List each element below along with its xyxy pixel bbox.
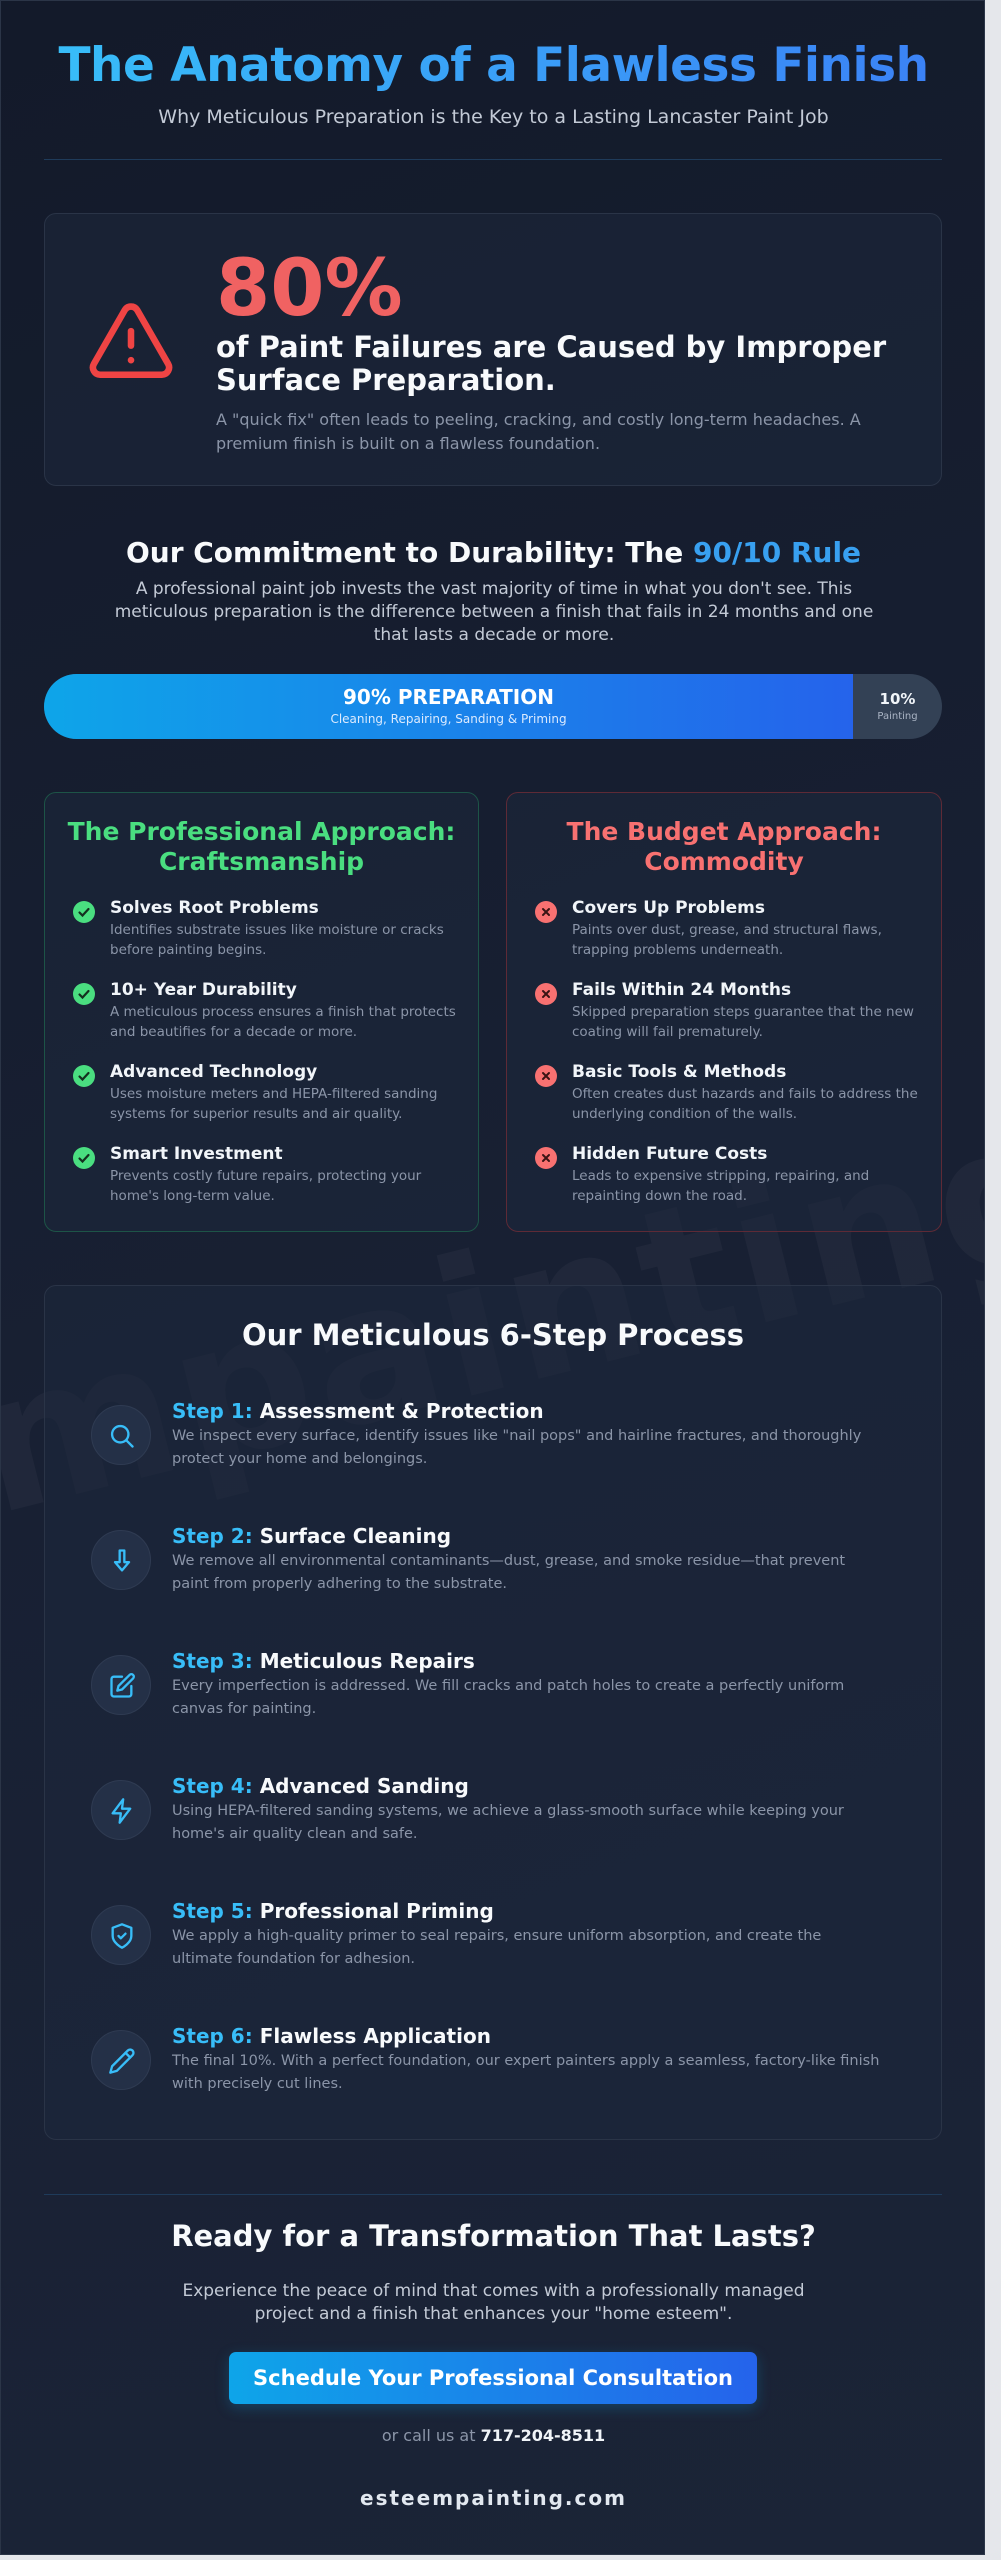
panel: 6-step process: Every imperfection is addressed. We fill cracks and patch holes to create a perfectly uniform canvas for painting. [172,1678,844,1717]
panel: budget approach: Basic Tools & Methods [572,1062,786,1082]
CTA heading: Ready for a Transformation That Lasts? [171,2219,816,2253]
CTA text: Experience the peace of mind that comes with a professionally managed project and a finish that enhances your "home esteem". [182,2281,805,2324]
panel: professional approach: 10+ Year Durability [110,980,297,1000]
panel: budget approach: Covers Up Problems [572,898,765,918]
panel: professional approach: Smart Investment [110,1144,283,1164]
paragraph: A professional paint job invests the vast majority of time in what you don't see. This meticulous preparation is the difference between a finish that fails in 24 months and one that lasts a decade or more. [115,579,873,645]
item 4 [73,1144,422,1204]
panel title: Commodity [644,847,804,876]
step 1 [91,1399,861,1467]
phone: or call us at 717-204-8511 [382,2426,605,2445]
panel: 6-step process: We inspect every surface, identify issues like "nail pops" and hairline fractures, and thoroughly protect your home and belongings. [172,1428,861,1467]
panel: professional approach: Advanced Technology [110,1062,317,1082]
bar chart: 90/10: Painting [877,711,918,722]
panel: budget approach [506,792,942,1232]
description: A "quick fix" often leads to peeling, cracking, and costly long-term headaches. A premium finish is built on a flawless foundation. [216,410,861,453]
panel: 6-step process: We apply a high-quality primer to seal repairs, ensure uniform absorption, and create the ultimate foundation for adhesion. [172,1928,821,1967]
panel: 80% stat [44,213,942,486]
bar chart: 90/10 [44,674,942,739]
bar chart: 90/10: Cleaning, Repairing, Sanding & Priming [330,712,567,726]
panel: budget approach: Skipped preparation steps guarantee that the new coating will fail prematurely. [572,1004,914,1040]
step 5 [91,1899,821,1967]
heading: 90/10 rule: Our Commitment to Durability: The 90/10 Rule [126,536,861,569]
panel: 6-step process: Using HEPA-filtered sanding systems, we achieve a glass-smooth surface while keeping your home's air quality clean and safe. [172,1803,844,1842]
panel: professional approach [44,792,479,1232]
panel: 6-step process: Step 4: Advanced Sanding [172,1774,469,1798]
website: esteempainting.com [360,2486,627,2510]
step 3 [91,1649,844,1717]
CTA button [229,2352,757,2404]
panel: 6-step process [44,1285,942,2140]
panel: budget approach: Paints over dust, grease, and structural flaws, trapping problems underneath. [572,922,882,958]
panel title: The Budget Approach: [567,817,881,846]
item 4 [535,1144,869,1204]
icon: warning triangle [90,303,172,378]
panel: 6-step process: Step 1: Assessment & Protection [172,1399,544,1423]
step 6 [91,2024,879,2092]
item 2 [73,980,456,1040]
panel: budget approach: Often creates dust hazards and fails to address the underlying condition of the walls. [572,1086,918,1122]
panel: 6-step process: We remove all environmental contaminants—dust, grease, and smoke residue—that prevent paint from properly adhering to the substrate. [172,1553,845,1592]
item 1 [73,898,444,958]
stat number: 80% [216,244,403,334]
section heading: Our Meticulous 6-Step Process [242,1318,744,1352]
item 1 [535,898,882,958]
panel: professional approach: Uses moisture meters and HEPA-filtered sanding systems for superior results and air quality. [110,1086,437,1122]
panel: professional approach: Identifies substrate issues like moisture or cracks before painting begins. [110,922,444,958]
panel: 6-step process: Step 6: Flawless Application [172,2024,491,2048]
subtitle: Why Meticulous Preparation is the Key to a Lasting Lancaster Paint Job [158,106,829,128]
CTA button: Schedule Your Professional Consultation [253,2366,733,2390]
panel title: Craftsmanship [159,847,364,876]
panel: professional approach: Prevents costly future repairs, protecting your home's long-term value. [110,1168,421,1204]
bar chart: 90/10: 10% [880,690,915,708]
item 3 [535,1062,918,1122]
item 2 [535,980,914,1040]
panel title [68,817,455,876]
bar chart: 90/10: 90% PREPARATION [343,685,554,709]
panel: 6-step process: Step 5: Professional Priming [172,1899,494,1923]
panel title: The Professional Approach: [68,817,455,846]
panel: budget approach: Hidden Future Costs [572,1144,767,1164]
step 4 [91,1774,844,1842]
panel: 6-step process: Step 3: Meticulous Repairs [172,1649,475,1673]
panel: budget approach: Leads to expensive stripping, repairing, and repainting down the road. [572,1168,869,1204]
panel title [566,817,881,876]
step 2 [91,1524,845,1592]
panel: professional approach: Solves Root Problems [110,898,319,918]
item 3 [73,1062,437,1122]
panel: budget approach: Fails Within 24 Months [572,980,791,1000]
title: The Anatomy of a Flawless Finish [58,38,929,93]
panel: professional approach: A meticulous process ensures a finish that protects and beautifies for a decade or more. [110,1004,456,1040]
panel: 6-step process: The final 10%. With a perfect foundation, our expert painters apply a seamless, factory-like finish with precisely cut lines. [172,2053,879,2092]
headline: of Paint Failures are Caused by Improper Surface Preparation. [216,330,886,397]
panel: 6-step process: Step 2: Surface Cleaning [172,1524,451,1548]
